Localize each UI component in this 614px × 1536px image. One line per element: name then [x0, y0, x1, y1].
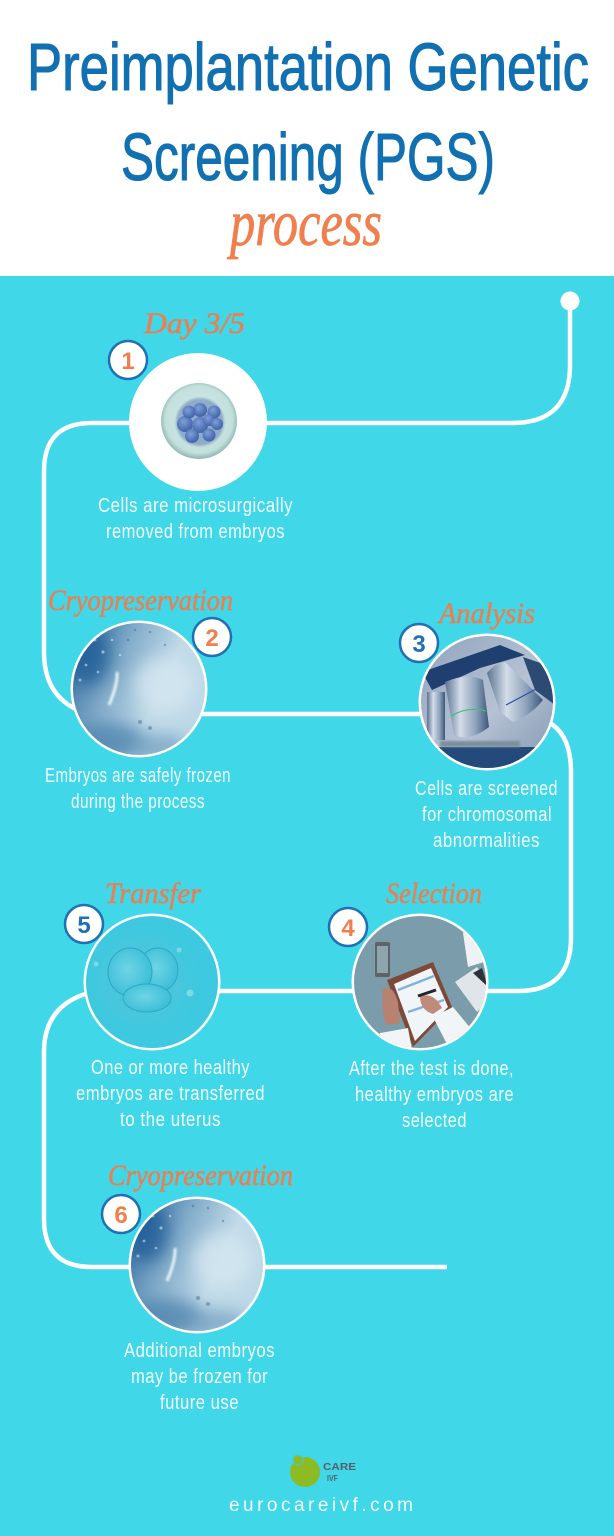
text: step 2 description: during the process	[71, 791, 205, 813]
badge 2: 2	[205, 625, 219, 652]
text: step 1 description: removed from embryos	[106, 521, 285, 543]
step 5: transfer	[65, 877, 265, 1131]
logo: Care IVF: CARE	[323, 1462, 356, 1473]
image: embryo under microscope	[84, 914, 220, 1050]
text: step 4 description: healthy embryos are	[355, 1084, 514, 1106]
badge 5: 5	[77, 912, 91, 939]
badge 1: 1	[121, 348, 135, 375]
subtitle: process: process	[227, 187, 382, 260]
heading: Cryopreservation: Cryopreservation	[48, 584, 233, 617]
badge 4	[329, 908, 367, 946]
text: step 4 description: After the test is done,	[349, 1058, 514, 1080]
text: step 5 description	[76, 1057, 265, 1131]
text: step 5 description: One or more healthy	[91, 1057, 250, 1079]
heading: Cryopreservation: Cryopreservation	[108, 1159, 293, 1192]
image: embryo with cell cluster	[129, 353, 267, 491]
text: step 5 description: to the uterus	[120, 1109, 221, 1131]
badge 1	[109, 341, 147, 379]
text: step 1 description	[98, 495, 293, 543]
step 1: embryo removal	[98, 307, 293, 543]
image: doctor filling a form	[350, 914, 490, 1050]
text: step 4 description	[349, 1058, 514, 1132]
step 2: cryopreservation	[45, 584, 233, 813]
text: step 1 description: Cells are microsurgically	[98, 495, 293, 517]
heading: Analysis: Analysis	[437, 597, 535, 630]
title	[27, 30, 589, 195]
heading: Selection: Selection	[386, 877, 482, 910]
image: microscope objectives	[418, 634, 556, 772]
step 4: selection	[329, 877, 514, 1132]
text: step 3 description	[415, 778, 558, 852]
text: step 6 description	[124, 1340, 275, 1414]
badge 4: 4	[341, 915, 355, 942]
timeline path	[44, 292, 580, 1267]
badge 5	[65, 905, 103, 943]
text: step 2 description: Embryos are safely frozen	[45, 765, 231, 787]
text: step 4 description: selected	[402, 1110, 467, 1132]
text: step 3 description: abnormalities	[433, 830, 540, 852]
text: step 6 description: future use	[160, 1392, 239, 1414]
logo: Care IVF: IVF	[327, 1474, 338, 1483]
text: step 6 description: Additional embryos	[124, 1340, 275, 1362]
badge 2	[193, 618, 231, 656]
website url: eurocareivf.com	[229, 1495, 413, 1516]
text: step 2 description	[45, 765, 231, 813]
heading: Transfer: Transfer	[105, 877, 201, 910]
step 6: cryopreservation	[102, 1159, 293, 1414]
image: frozen embryos	[128, 1196, 266, 1334]
text: step 6 description: may be frozen for	[131, 1366, 268, 1388]
badge 6	[102, 1195, 140, 1233]
title: Screening (PGS)	[121, 120, 495, 195]
badge 3	[400, 624, 438, 662]
text: step 3 description: Cells are screened	[415, 778, 558, 800]
image: frozen embryos	[70, 620, 208, 758]
badge 3: 3	[412, 631, 426, 658]
text: step 3 description: for chromosomal	[422, 804, 552, 826]
step 3: analysis	[400, 597, 558, 852]
badge 6: 6	[114, 1202, 128, 1229]
logo: Care IVF	[290, 1455, 356, 1487]
text: step 5 description: embryos are transferred	[76, 1083, 265, 1105]
heading: Day 3/5: Day 3/5	[143, 307, 245, 340]
